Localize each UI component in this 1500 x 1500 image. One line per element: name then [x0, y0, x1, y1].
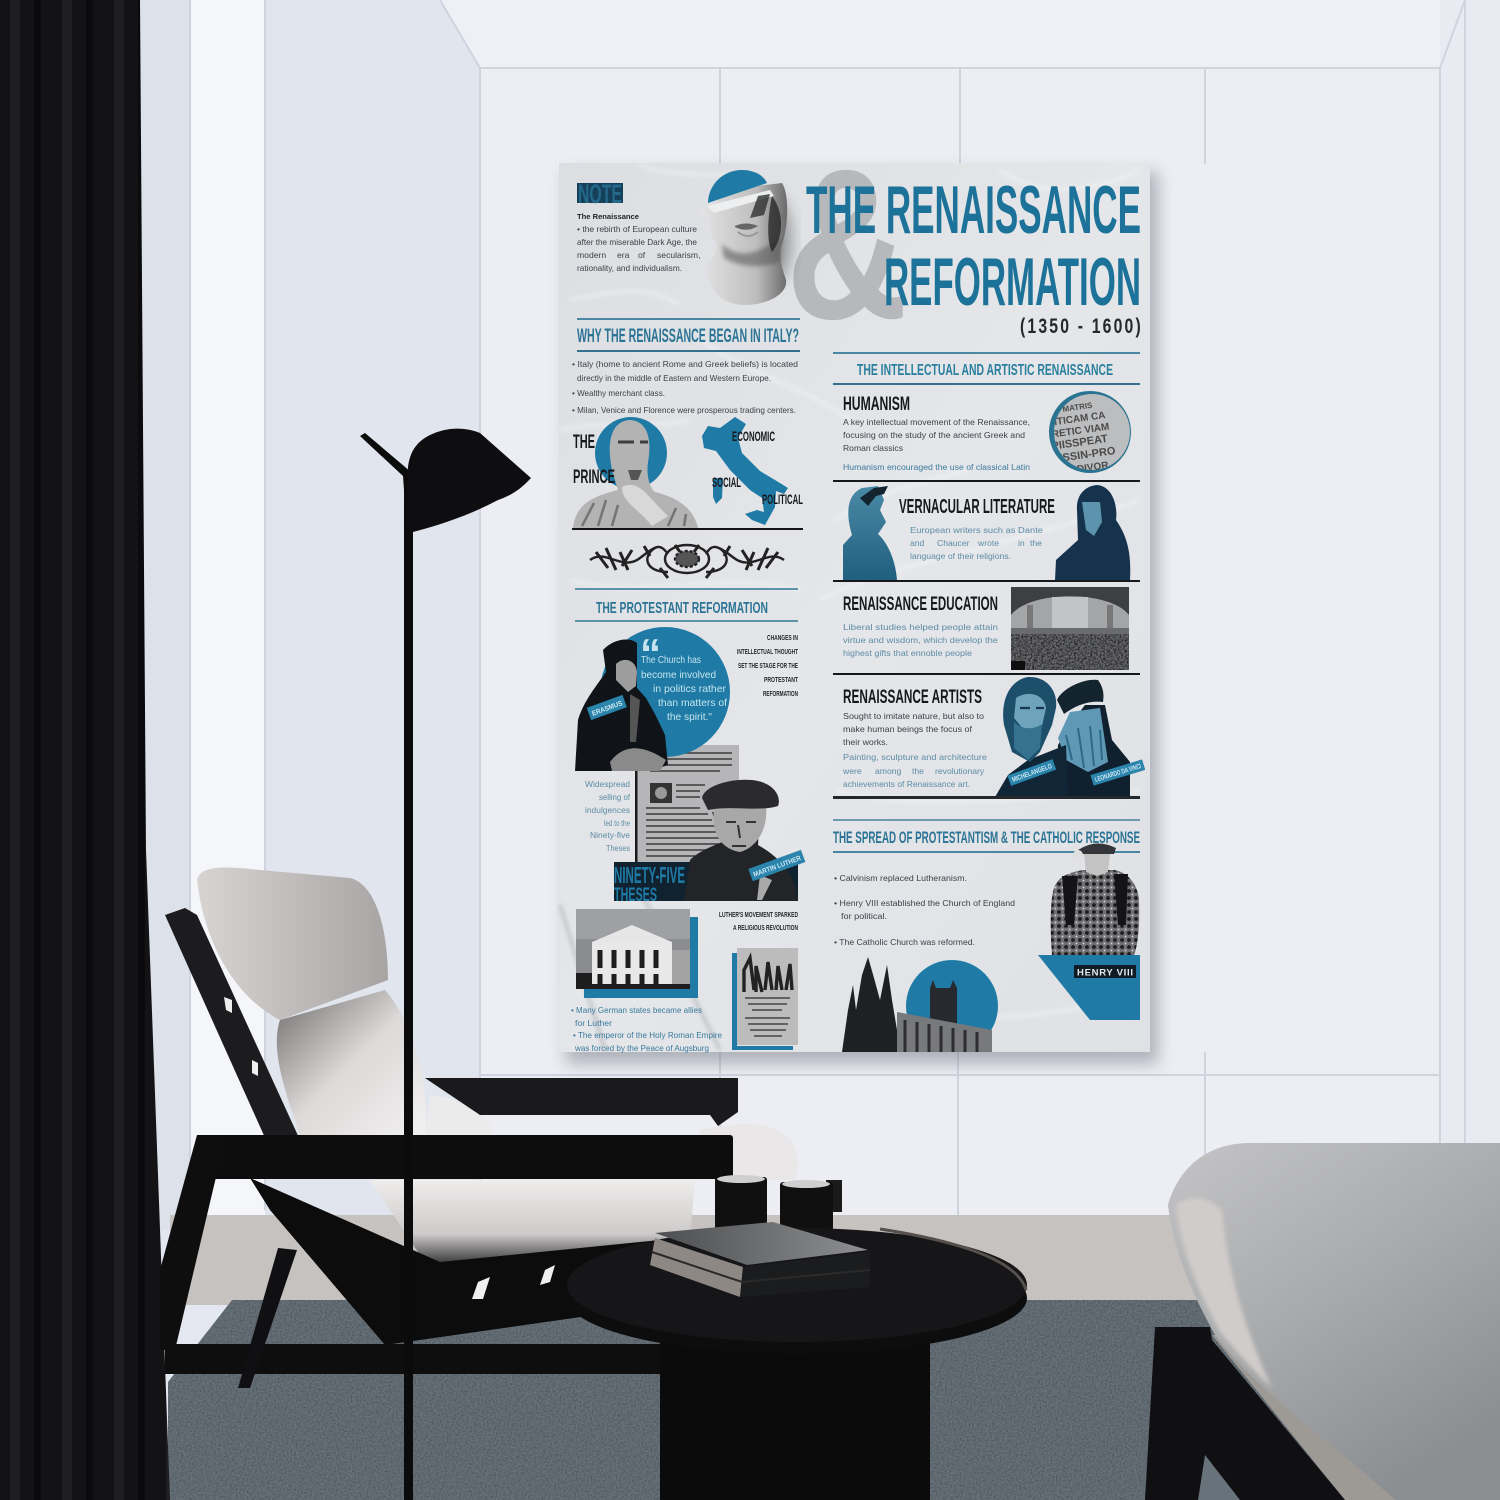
spread bullet list: for political. — [841, 911, 887, 921]
The Prince illustration — [572, 417, 803, 530]
Italy bullet list: • Wealthy merchant class. — [572, 388, 665, 398]
section: Renaissance artists: Painting, sculpture and architecture — [843, 752, 987, 762]
note text: era — [617, 250, 630, 260]
Erasmus quote text: in politics rather — [653, 683, 726, 695]
photo: School of Athens — [1011, 587, 1129, 670]
divider — [833, 673, 1140, 675]
section: Renaissance artists: RENAISSANCE ARTISTS — [843, 687, 982, 708]
Erasmus quote text: “ — [640, 630, 661, 677]
section: Renaissance artists: were — [842, 766, 862, 776]
map of Italy: POLITICAL — [762, 491, 803, 507]
side note: indulgences: indulgences — [585, 805, 630, 815]
chair lower armrest — [197, 1135, 733, 1179]
bottom bullet list: German states: • The emperor of the Holy Roman Empire — [573, 1030, 722, 1040]
side note: indulgences — [585, 779, 631, 853]
section: Renaissance artists: achievements of Renaissance art. — [843, 779, 970, 789]
heading: the Protestant Reformation: THE PROTESTANT REFORMATION — [596, 600, 768, 617]
section: vernacular literature: European writers such as Dante — [910, 525, 1043, 535]
chair seat cushion — [370, 1180, 695, 1270]
chair body — [250, 1178, 700, 1345]
section: Humanism: A key intellectual movement of the Renaissance, — [843, 417, 1030, 427]
room: floor lamp — [360, 429, 531, 1500]
side note: changes in intellectual thought: INTELLECTUAL THOUGHT — [737, 647, 798, 656]
section: Renaissance education: highest gifts that ennoble people — [843, 648, 972, 658]
note text: after the miserable Dark Age, the — [577, 237, 697, 247]
bottom bullet list: German states: • Many German states became allies — [571, 1005, 702, 1015]
section: Renaissance education: Liberal studies helped people attain — [843, 622, 998, 632]
room: lounge chair — [160, 867, 798, 1388]
chair headrest cushion — [197, 867, 388, 1020]
The Prince illustration: PRINCE — [573, 467, 615, 488]
section: Humanism — [843, 391, 1131, 478]
Ninety-Five Theses banner — [614, 862, 798, 906]
cathedral with blue circle — [842, 957, 998, 1052]
section: vernacular literature: wrote — [977, 538, 999, 548]
side note: Luther's movement: A RELIGIOUS REVOLUTION — [733, 923, 798, 932]
window light streaks — [560, 890, 720, 1050]
note text: rationality, and individualism. — [577, 263, 682, 273]
section: Renaissance education: virtue and wisdom, which develop the — [843, 635, 998, 645]
chair base bar — [165, 1344, 665, 1374]
section: vernacular literature: in — [1018, 538, 1025, 548]
old book cover with blue frame — [732, 948, 798, 1050]
room: side table — [567, 1228, 1027, 1500]
section: Renaissance artists: revolutionary — [935, 766, 985, 776]
Italy bullet list: • Italy (home to ancient Rome and Greek beliefs) is located — [572, 359, 798, 369]
title: (1350 - 1600) — [1020, 314, 1141, 338]
section: Renaissance artists: among — [875, 766, 901, 776]
icon: Latin inscription disc: RETIC VIAM — [1051, 422, 1110, 441]
map of Italy — [702, 417, 803, 525]
portrait: Henry VIII — [1051, 843, 1139, 955]
section: Renaissance artists: the — [912, 766, 924, 776]
Erasmus quote text: become involved — [641, 669, 716, 681]
note text — [577, 212, 700, 273]
icon: Latin inscription disc — [1046, 391, 1131, 478]
section: vernacular literature: the — [1030, 538, 1042, 548]
note box — [577, 179, 623, 209]
label: Leonardo da Vinci — [1090, 759, 1145, 786]
Erasmus quote text: The Church has — [641, 654, 701, 666]
ornament scroll — [590, 545, 784, 578]
divider — [833, 796, 1140, 799]
portrait: Michelangelo — [995, 677, 1068, 797]
section: Humanism: Humanism encouraged the use of classical Latin — [843, 462, 1030, 472]
chair back cushion — [277, 990, 426, 1136]
icon: Latin inscription disc: VSSIN-PRO — [1055, 445, 1117, 465]
room: stack of books — [650, 1222, 870, 1297]
portrait: Erasmus — [575, 639, 668, 771]
section: Renaissance artists: Sought to imitate nature, but also to — [843, 711, 984, 721]
section: Humanism: Roman classics — [843, 443, 903, 453]
side note: indulgences: led to the — [604, 818, 630, 828]
Erasmus quote text — [640, 630, 727, 723]
room: floor and carpet — [168, 1215, 1500, 1500]
side note: Luther's movement — [719, 910, 798, 932]
room: wall-mounted poster shadow — [566, 172, 1158, 1064]
poster — [559, 125, 1150, 1053]
section: Humanism: focusing on the study of the ancient Greek and — [843, 430, 1025, 440]
side note: changes in intellectual thought: SET THE STAGE FOR THE — [738, 661, 798, 670]
icon: Latin inscription disc: PIISSPEAT — [1051, 433, 1109, 453]
section: Renaissance education — [843, 587, 1129, 670]
portrait: Chaucer — [1055, 485, 1130, 580]
bottom bullet list: German states: was forced by the Peace of Augsburg — [574, 1043, 709, 1053]
title: REFORMATION — [884, 244, 1141, 320]
portrait: Dante — [843, 486, 897, 580]
Henry VIII blue banner: HENRY VIII — [1077, 968, 1133, 978]
portrait: Martin Luther — [684, 780, 805, 901]
bottom bullet list: German states — [571, 1005, 722, 1053]
ampersand: & — [786, 125, 908, 364]
The Prince illustration: THE — [573, 432, 595, 453]
Henry VIII blue banner — [1038, 955, 1140, 1020]
side note: indulgences: selling of — [599, 792, 631, 802]
icon: classical bust with blue cap — [700, 170, 791, 305]
note text: secularism, — [657, 250, 700, 260]
Erasmus quote text: than matters of — [658, 697, 727, 709]
section: vernacular literature: language of their religions. — [910, 551, 1011, 561]
note text: modern — [577, 250, 606, 260]
chair upper armrest — [425, 1078, 738, 1126]
portrait: Leonardo da Vinci — [1056, 680, 1130, 797]
map of Italy: ECONOMIC — [732, 428, 775, 444]
spread bullet list — [834, 873, 1015, 947]
section: Renaissance education: RENAISSANCE EDUCATION — [843, 594, 998, 615]
side note: changes in intellectual thought — [737, 633, 798, 698]
note box: NOTE — [578, 179, 622, 209]
chair legs — [160, 1135, 226, 1350]
note text: • the rebirth of European culture — [577, 224, 697, 234]
room: bed — [1145, 1143, 1500, 1500]
section: Renaissance artists — [842, 677, 1145, 797]
church photo with blue frame — [576, 909, 698, 998]
label: Michelangelo — [1007, 759, 1056, 786]
Erasmus quote text: the spirit." — [667, 711, 712, 723]
label: Leonardo da Vinci: LEONARDO DA VINCI — [1094, 763, 1142, 784]
section: Renaissance artists: their works. — [843, 737, 888, 747]
Erasmus quote circle — [600, 627, 730, 757]
Italy bullet list: directly in the middle of Eastern and Western Europe. — [577, 373, 771, 383]
portrait: Erasmus: ERASMUS — [591, 700, 624, 718]
icon: Latin inscription disc: ITICAM CA — [1054, 410, 1106, 428]
side note: indulgences: Theses — [606, 843, 630, 853]
poster wrinkles — [560, 165, 1140, 1020]
side note: Luther's movement: LUTHER'S MOVEMENT SPARKED — [719, 910, 798, 919]
Ninety-Five Theses banner: NINETY-FIVE — [614, 862, 685, 888]
section: Renaissance artists: make human beings the focus of — [843, 724, 973, 734]
room: curtain — [0, 0, 170, 1500]
section: vernacular literature: Chaucer — [937, 538, 970, 548]
side note: changes in intellectual thought: REFORMATION — [763, 689, 798, 698]
side note: changes in intellectual thought: CHANGES IN — [767, 633, 798, 642]
icon: Latin inscription disc: DIVOR — [1076, 460, 1110, 475]
bottom bullet list: German states: for Luther — [575, 1018, 612, 1028]
spread bullet list: • The Catholic Church was reformed. — [834, 937, 975, 947]
portrait: Martin Luther: MARTIN LUTHER — [753, 855, 802, 879]
title: THE RENAISSANCE — [806, 172, 1141, 248]
chair back frame — [165, 908, 300, 1160]
section: vernacular literature — [843, 485, 1130, 580]
heading: why the Renaissance began in Italy: WHY THE RENAISSANCE BEGAN IN ITALY? — [577, 326, 799, 347]
Italy bullet list: • Milan, Venice and Florence were prosperous trading centers. — [572, 405, 796, 415]
side note: indulgences: Ninety-five — [590, 830, 630, 840]
divider — [833, 480, 1140, 482]
spread bullet list: • Henry VIII established the Church of England — [834, 898, 1015, 908]
room: candles — [715, 1175, 842, 1242]
section: Humanism: HUMANISM — [843, 394, 910, 415]
heading: intellectual and artistic Renaissance: THE INTELLECTUAL AND ARTISTIC RENAISSANCE — [857, 362, 1113, 379]
label: Michelangelo: MICHELANGELO — [1011, 763, 1053, 784]
side note: changes in intellectual thought: PROTESTANT — [764, 675, 798, 684]
Ninety-Five Theses banner: THESES — [614, 885, 657, 906]
Italy bullet list — [572, 359, 798, 415]
icon: Latin inscription disc: MATRIS — [1062, 401, 1094, 414]
section: vernacular literature: VERNACULAR LITERATURE — [899, 496, 1055, 518]
map of Italy: SOCIAL — [712, 474, 741, 490]
section: vernacular literature: and — [910, 538, 925, 548]
title — [806, 172, 1141, 338]
heading: spread of Protestantism: THE SPREAD OF PROTESTANTISM & THE CATHOLIC RESPONSE — [833, 828, 1140, 847]
note text: The Renaissance — [577, 212, 639, 221]
Ninety-Five Theses document — [635, 745, 739, 863]
spread bullet list: • Calvinism replaced Lutheranism. — [834, 873, 967, 883]
divider — [833, 580, 1140, 582]
side note: indulgences: Widespread — [585, 779, 630, 789]
note text: of — [638, 250, 646, 260]
